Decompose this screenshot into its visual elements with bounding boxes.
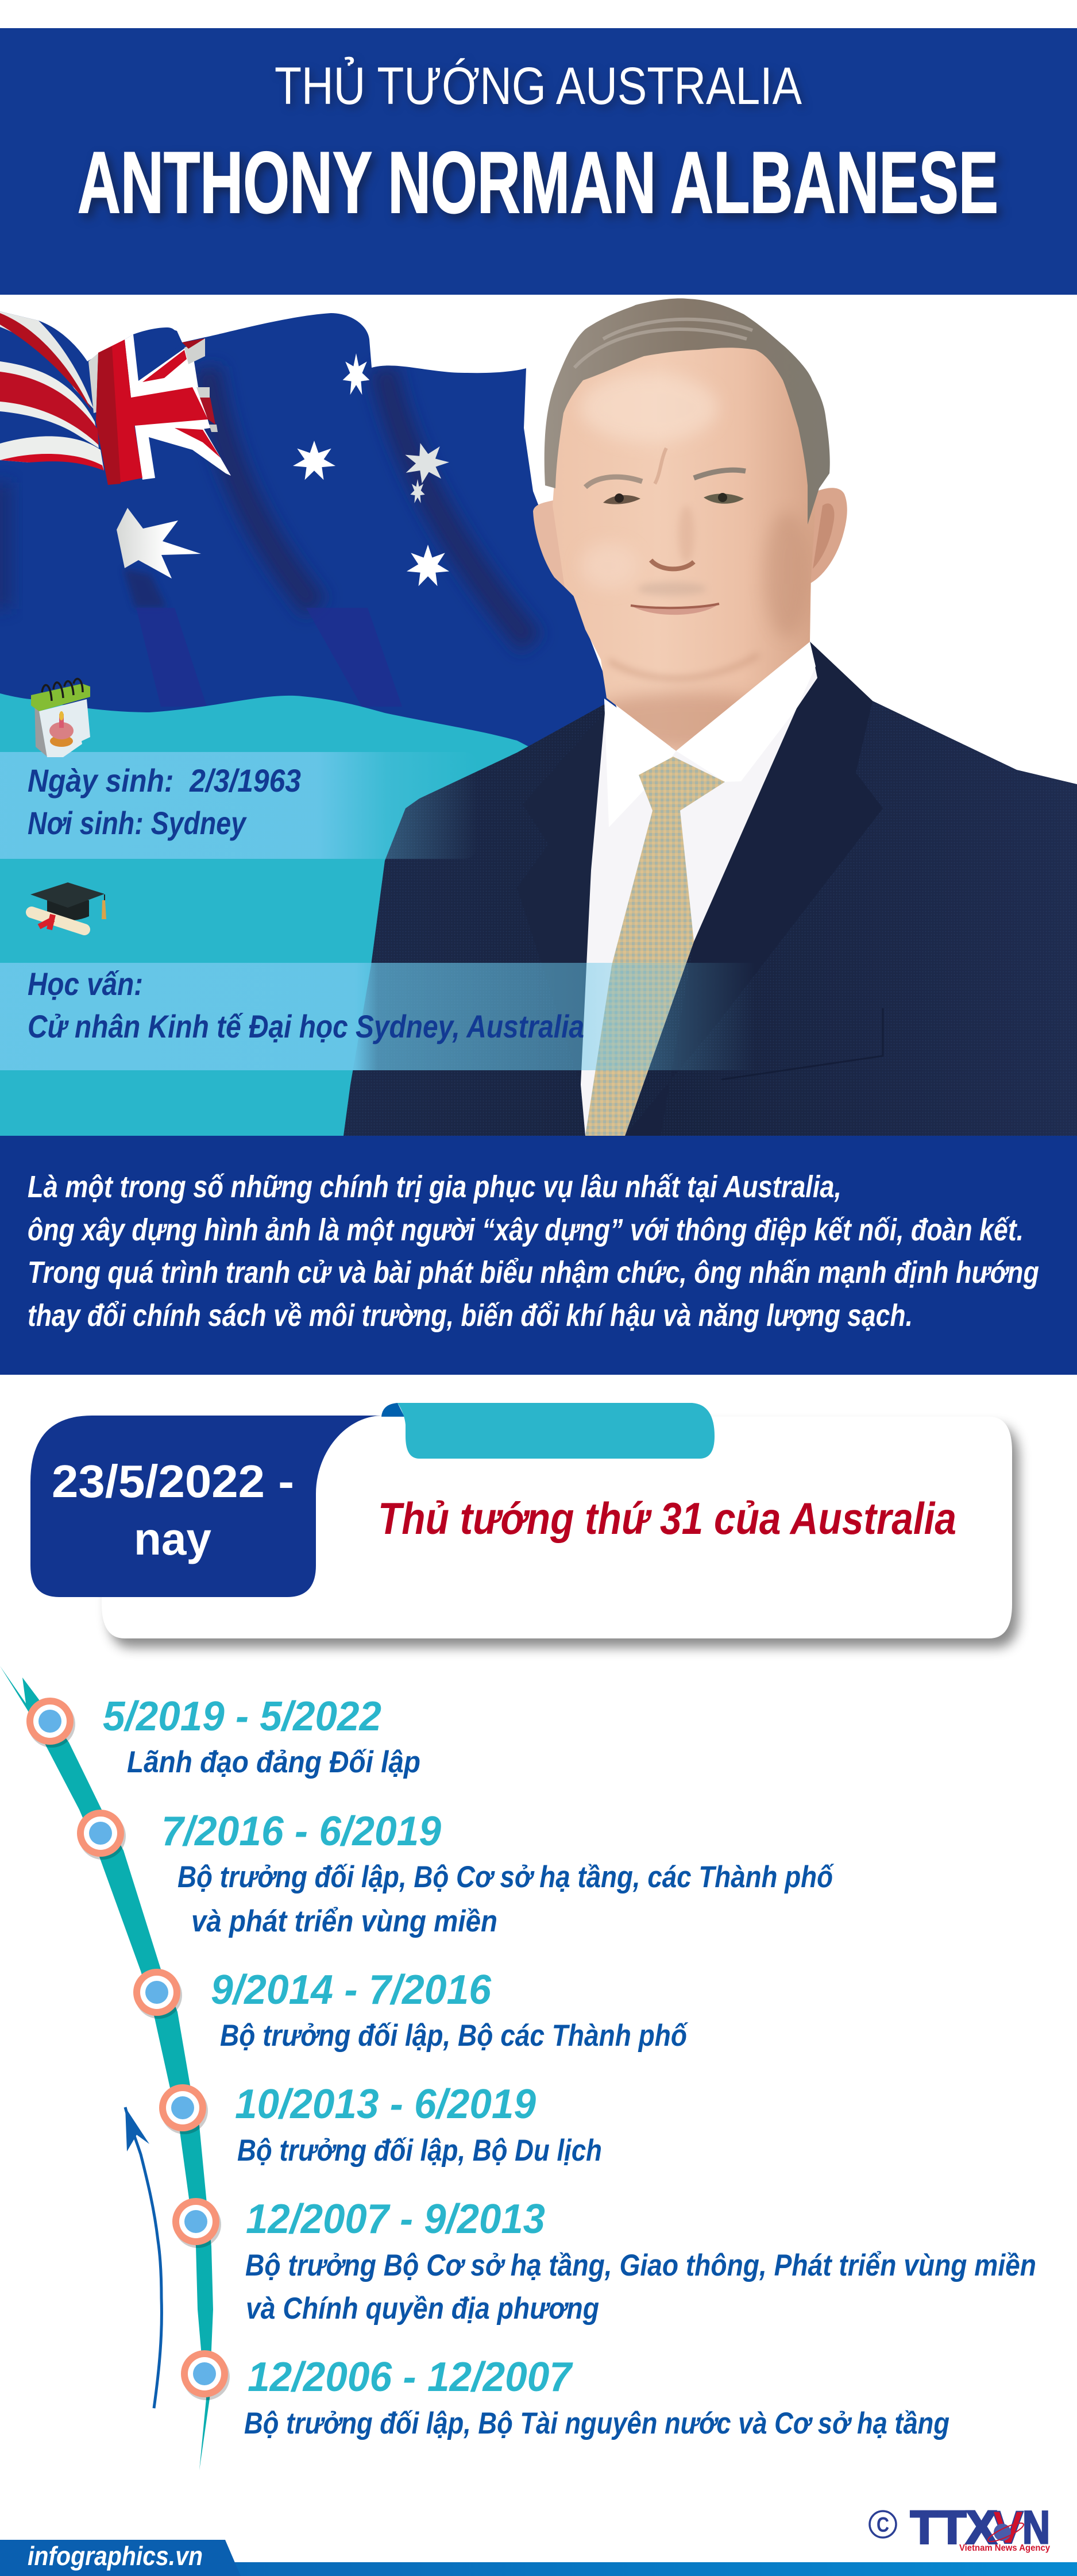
info band 2 [0, 963, 755, 1070]
ears [533, 500, 566, 587]
current office card: nay [134, 1513, 211, 1564]
ribbon fold [381, 1403, 404, 1417]
entry 2006-2007: Bộ trưởng đối lập, Bộ Tài nguyên nước và Cơ sở hạ tầng [244, 2407, 949, 2440]
entry 2016-2019 [161, 1808, 834, 1938]
education label: Học vấn: [28, 966, 143, 1002]
TTXVN logo: C [877, 2513, 889, 2536]
suit jacket [343, 642, 1077, 1136]
portrait of Anthony Albanese [343, 298, 1077, 1136]
Australian flag [0, 311, 632, 747]
entry 2016-2019: 7/2016 - 6/2019 [161, 1808, 441, 1854]
nose [651, 560, 694, 569]
teal wave background [0, 693, 551, 1136]
header banner [0, 28, 1077, 295]
node 1 [26, 1698, 75, 1748]
mouth [634, 606, 717, 615]
TTXVN logo: TTX [910, 2502, 997, 2554]
entry 2007-2013: 12/2007 - 9/2013 [246, 2196, 545, 2242]
intro paragraph: thay đổi chính sách về môi trường, biến đổi khí hậu và năng lượng sạch. [28, 1298, 913, 1333]
entry 2006-2007: 12/2006 - 12/2007 [248, 2354, 573, 2400]
neck [601, 574, 811, 751]
intro text panel [0, 1136, 1077, 1375]
node 4 [159, 2084, 208, 2134]
entry 2013-2019: Bộ trưởng đối lập, Bộ Du lịch [237, 2134, 602, 2168]
website: infographics.vn [28, 2541, 203, 2571]
icon: birthday calendar [31, 679, 90, 757]
entry 2019-2022: 5/2019 - 5/2022 [103, 1694, 381, 1740]
node 6 [181, 2350, 230, 2400]
eyebrows [585, 477, 642, 487]
jaw line [609, 655, 758, 678]
office title: Thủ tướng thứ 31 của Australia [378, 1493, 956, 1544]
necktie [585, 757, 725, 1136]
TTXVN logo: N [1022, 2502, 1050, 2554]
right lapel [625, 642, 883, 1136]
intro paragraph [28, 1170, 1039, 1333]
eyes [603, 495, 640, 504]
current office card [30, 1403, 1012, 1638]
title line 1: THỦ TƯỚNG AUSTRALIA [275, 56, 802, 115]
footer bar [0, 2540, 1077, 2576]
icon: graduation cap [30, 882, 106, 930]
info band 1 [0, 752, 477, 859]
intro paragraph: Là một trong số những chính trị gia phục vụ lâu nhất tại Australia, [28, 1170, 841, 1204]
entry 2019-2022: Lãnh đạo đảng Đối lập [127, 1745, 420, 1779]
entry 2013-2019: 10/2013 - 6/2019 [235, 2081, 536, 2127]
entry 2013-2019 [235, 2081, 602, 2168]
brow furrow [655, 448, 666, 484]
career timeline [0, 1666, 1036, 2470]
union jack [0, 311, 231, 485]
hero panel with flag and portrait [0, 298, 1077, 1136]
birth place: Nơi sinh: Sydney [28, 805, 247, 841]
entry 2014-2016: Bộ trưởng đối lập, Bộ các Thành phố [220, 2019, 688, 2053]
education detail: Cử nhân Kinh tế Đại học Sydney, Australia [28, 1008, 584, 1044]
entry 2006-2007 [244, 2354, 949, 2440]
flag fold shading [0, 368, 531, 707]
date tab [30, 1416, 381, 1597]
entry 2016-2019: Bộ trưởng đối lập, Bộ Cơ sở hạ tầng, các Thành phố [177, 1860, 834, 1894]
teal ribbon [397, 1403, 715, 1459]
TTXVN logo: V [993, 2502, 1024, 2554]
face shading [764, 511, 810, 638]
entry 2007-2013: và Chính quyền địa phương [246, 2292, 599, 2326]
left lapel [517, 712, 605, 1085]
TTXVN logo [870, 2502, 1050, 2554]
jacket pocket [721, 1008, 883, 1079]
direction arrow [125, 2107, 161, 2408]
shirt [581, 642, 817, 1136]
entry 2014-2016 [211, 1967, 688, 2053]
face [553, 348, 811, 751]
node 2 [77, 1810, 126, 1860]
entry 2019-2022 [103, 1694, 420, 1779]
entry 2007-2013 [245, 2196, 1036, 2326]
hair [545, 298, 830, 525]
flag stars [117, 353, 453, 586]
birth date: Ngày sinh: 2/3/1963 [28, 762, 301, 799]
entry 2016-2019: và phát triển vùng miền [191, 1904, 497, 1938]
timeline line [0, 1666, 213, 2470]
white card [102, 1417, 1012, 1638]
TTXVN logo: Vietnam News Agency [959, 2543, 1050, 2553]
node 5 [172, 2198, 221, 2248]
entry 2014-2016: 9/2014 - 7/2016 [211, 1967, 492, 2013]
node 3 [133, 1969, 182, 2019]
date text: 23/5/2022 - [52, 1456, 294, 1507]
